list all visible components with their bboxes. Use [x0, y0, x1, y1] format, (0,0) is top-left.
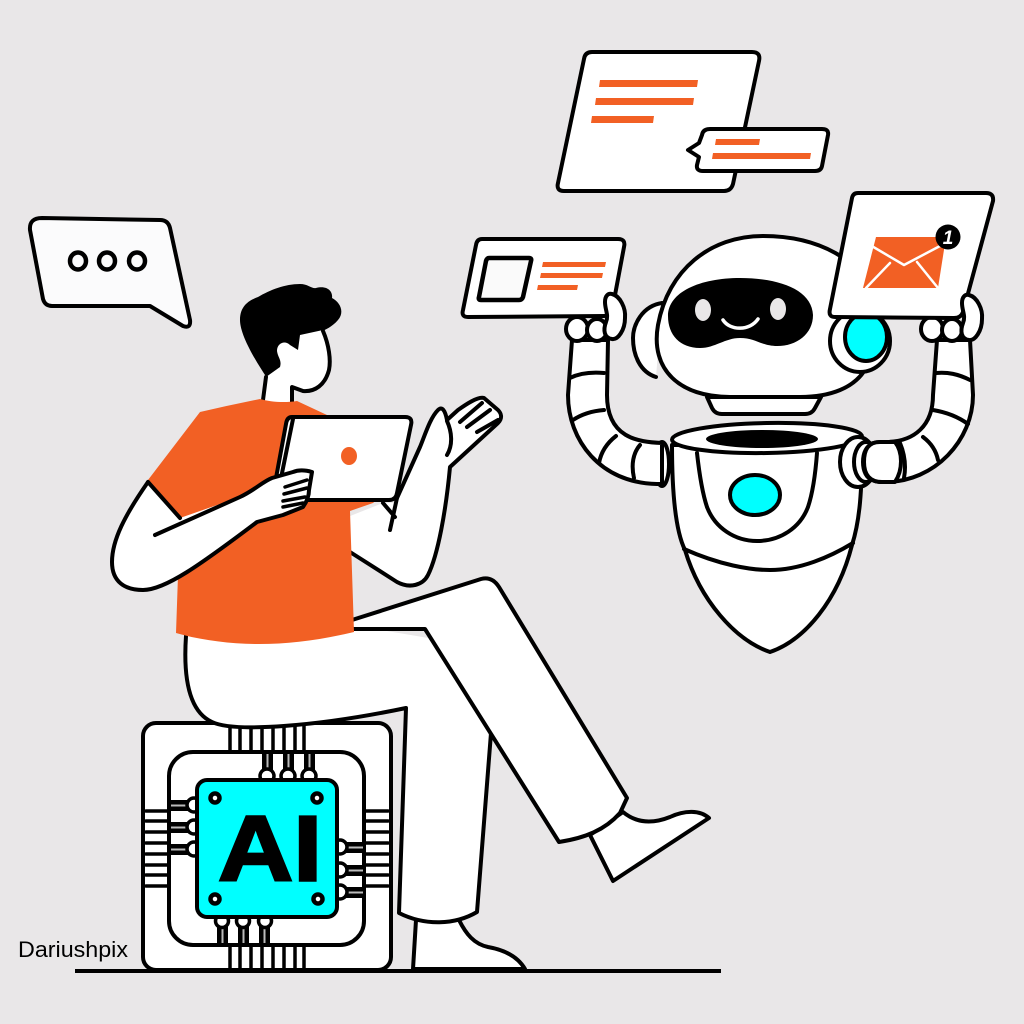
person's hair — [240, 284, 341, 378]
robot right ear with cyan light — [830, 310, 890, 372]
robot left thumb — [604, 294, 625, 339]
robot body — [672, 421, 862, 652]
robot neck — [707, 397, 821, 414]
left card held by robot — [463, 239, 624, 317]
tablet — [276, 417, 411, 500]
floating document card — [558, 52, 759, 191]
notification badge: 1 — [943, 228, 953, 249]
notification badge — [936, 224, 960, 250]
right card with envelope — [830, 193, 993, 318]
robot neck opening — [706, 430, 818, 448]
robot left arm — [568, 340, 669, 486]
icon: orange envelope — [863, 237, 946, 288]
person's raised shoe — [590, 812, 709, 881]
robot head — [657, 236, 880, 397]
orange t-shirt — [148, 399, 400, 644]
robot right eye — [770, 298, 786, 320]
robot left eye — [695, 299, 711, 321]
robot visor face — [668, 278, 813, 348]
robot right shoulder joint — [840, 437, 901, 487]
AI label: AI — [218, 797, 322, 900]
person's arm holding tablet — [112, 470, 312, 590]
robot chest light — [730, 475, 780, 515]
robot smile — [723, 319, 758, 328]
chip connector stems — [169, 752, 365, 945]
chip contact pads — [187, 769, 347, 928]
person's face and neck — [263, 330, 330, 402]
chip inner frame — [169, 752, 364, 945]
chip pin stripes — [146, 725, 388, 968]
robot fingers behind cards — [566, 317, 962, 341]
watermark: Dariushpix — [18, 937, 128, 962]
ground line — [75, 969, 721, 973]
robot left ear — [633, 303, 662, 377]
person's raised arm and hand — [340, 398, 501, 586]
chip outer box — [143, 723, 391, 970]
robot body rim — [672, 421, 862, 455]
trousers — [185, 578, 627, 922]
AI chip seat — [143, 723, 391, 970]
speech bubble with three dots — [30, 218, 190, 327]
tablet orange dot — [341, 447, 357, 465]
small chat bubble — [688, 129, 828, 171]
robot right arm — [864, 340, 973, 482]
person's standing shoe — [413, 920, 525, 969]
chip screw holes — [210, 794, 322, 904]
robot right thumb — [961, 295, 982, 340]
chip cyan core — [197, 780, 337, 917]
